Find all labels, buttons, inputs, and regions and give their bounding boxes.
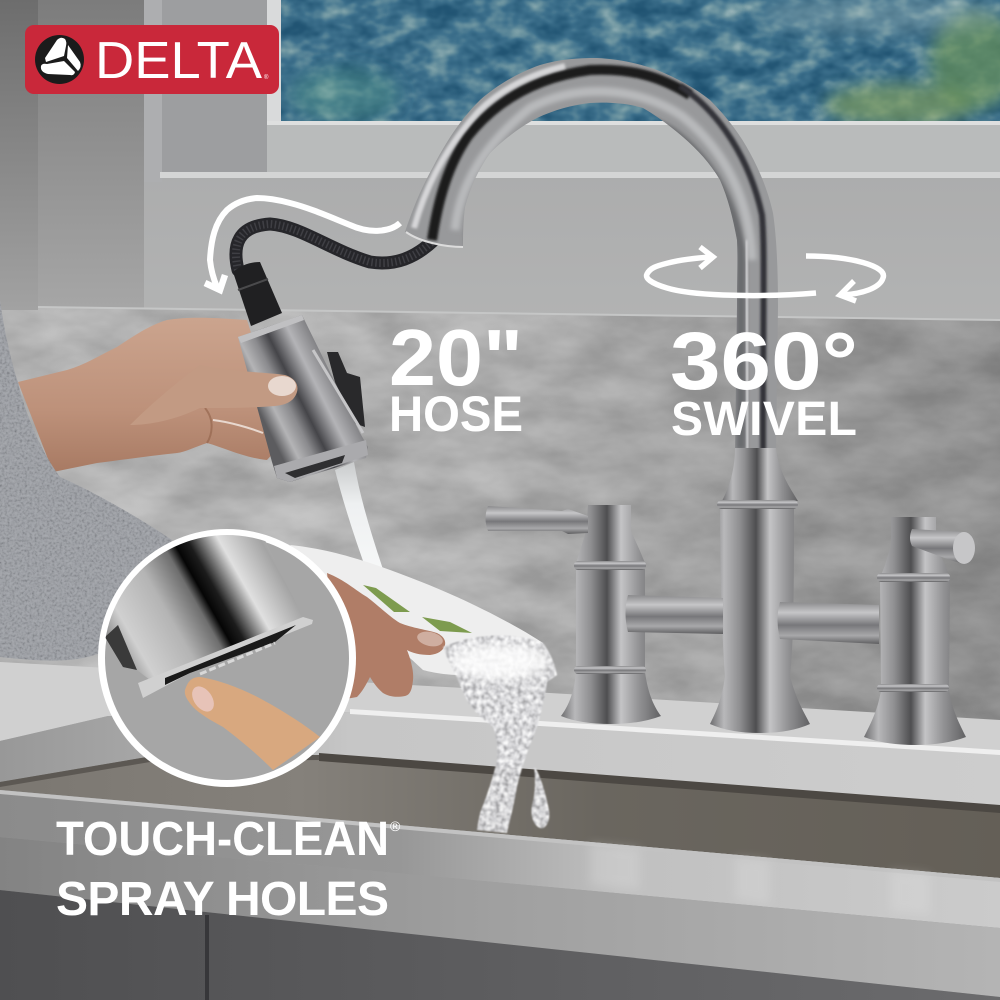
cabinet [0, 890, 1000, 1000]
logo wordmark: DELTA [95, 32, 262, 90]
hose length callout: 20" hose: HOSE [389, 386, 523, 442]
thumb [130, 365, 298, 425]
inset fingernail [192, 686, 214, 712]
left cross pipe [626, 595, 723, 634]
right handle valve [864, 517, 975, 745]
left handle valve [486, 505, 661, 724]
front counter edge [0, 837, 1000, 997]
right cross pipe [778, 602, 879, 644]
white plate [290, 545, 543, 680]
feature caption: touch-clean spray holes: TOUCH-CLEAN [56, 813, 389, 866]
right lever [910, 529, 964, 564]
inset sprayer metal [106, 535, 298, 679]
feature caption: touch-clean spray holes: ® [390, 818, 401, 834]
arrows: 360 degree swivel [647, 247, 883, 301]
swivel callout: 360 degree swivel: 360° [670, 316, 858, 407]
sink basin [0, 755, 1000, 878]
feature caption: touch-clean spray holes: SPRAY HOLES [56, 873, 389, 926]
icon: Delta logo mark [35, 35, 84, 84]
lower hand fingernail [416, 629, 444, 649]
counter front edge [0, 712, 1000, 807]
inset spray nozzles [200, 643, 275, 674]
thumb nail [268, 376, 296, 396]
countertop surface [0, 662, 1000, 753]
pull-down sprayer head [233, 262, 368, 482]
hose length callout: 20" hose [389, 313, 523, 442]
left lever [486, 506, 588, 534]
sprayer connector [233, 262, 282, 326]
arrow: hose pull-down [205, 198, 400, 290]
column body [710, 508, 810, 733]
plate food scraps [363, 585, 472, 633]
window trim [38, 0, 1000, 321]
grey sweater sleeve [0, 295, 180, 670]
icon: Delta logo badge [25, 25, 279, 94]
swivel callout: 360 degree swivel: SWIVEL [671, 393, 857, 446]
top hand holding sprayer [18, 318, 285, 472]
swivel callout: 360 degree swivel [670, 316, 858, 446]
column flare [722, 448, 798, 501]
marble backsplash [0, 300, 1000, 740]
hose length callout: 20" hose: 20" [389, 313, 523, 402]
window with forest view [281, 0, 1000, 127]
water stream [335, 462, 394, 602]
sprayer trigger [327, 352, 365, 427]
water splash [442, 635, 558, 834]
left wall strip [0, 0, 38, 310]
sprayer body [238, 315, 368, 482]
registered mark: ® [264, 74, 269, 81]
lower hand holding plate [327, 573, 445, 700]
front counter ledge [0, 790, 1000, 928]
pull-down braided hose [236, 224, 434, 270]
feature caption: touch-clean spray holes [56, 813, 401, 926]
gooseneck spout and main column [405, 58, 810, 733]
zoom inset circle: touch-clean spray holes [98, 520, 356, 787]
inset fingertip [185, 677, 320, 770]
